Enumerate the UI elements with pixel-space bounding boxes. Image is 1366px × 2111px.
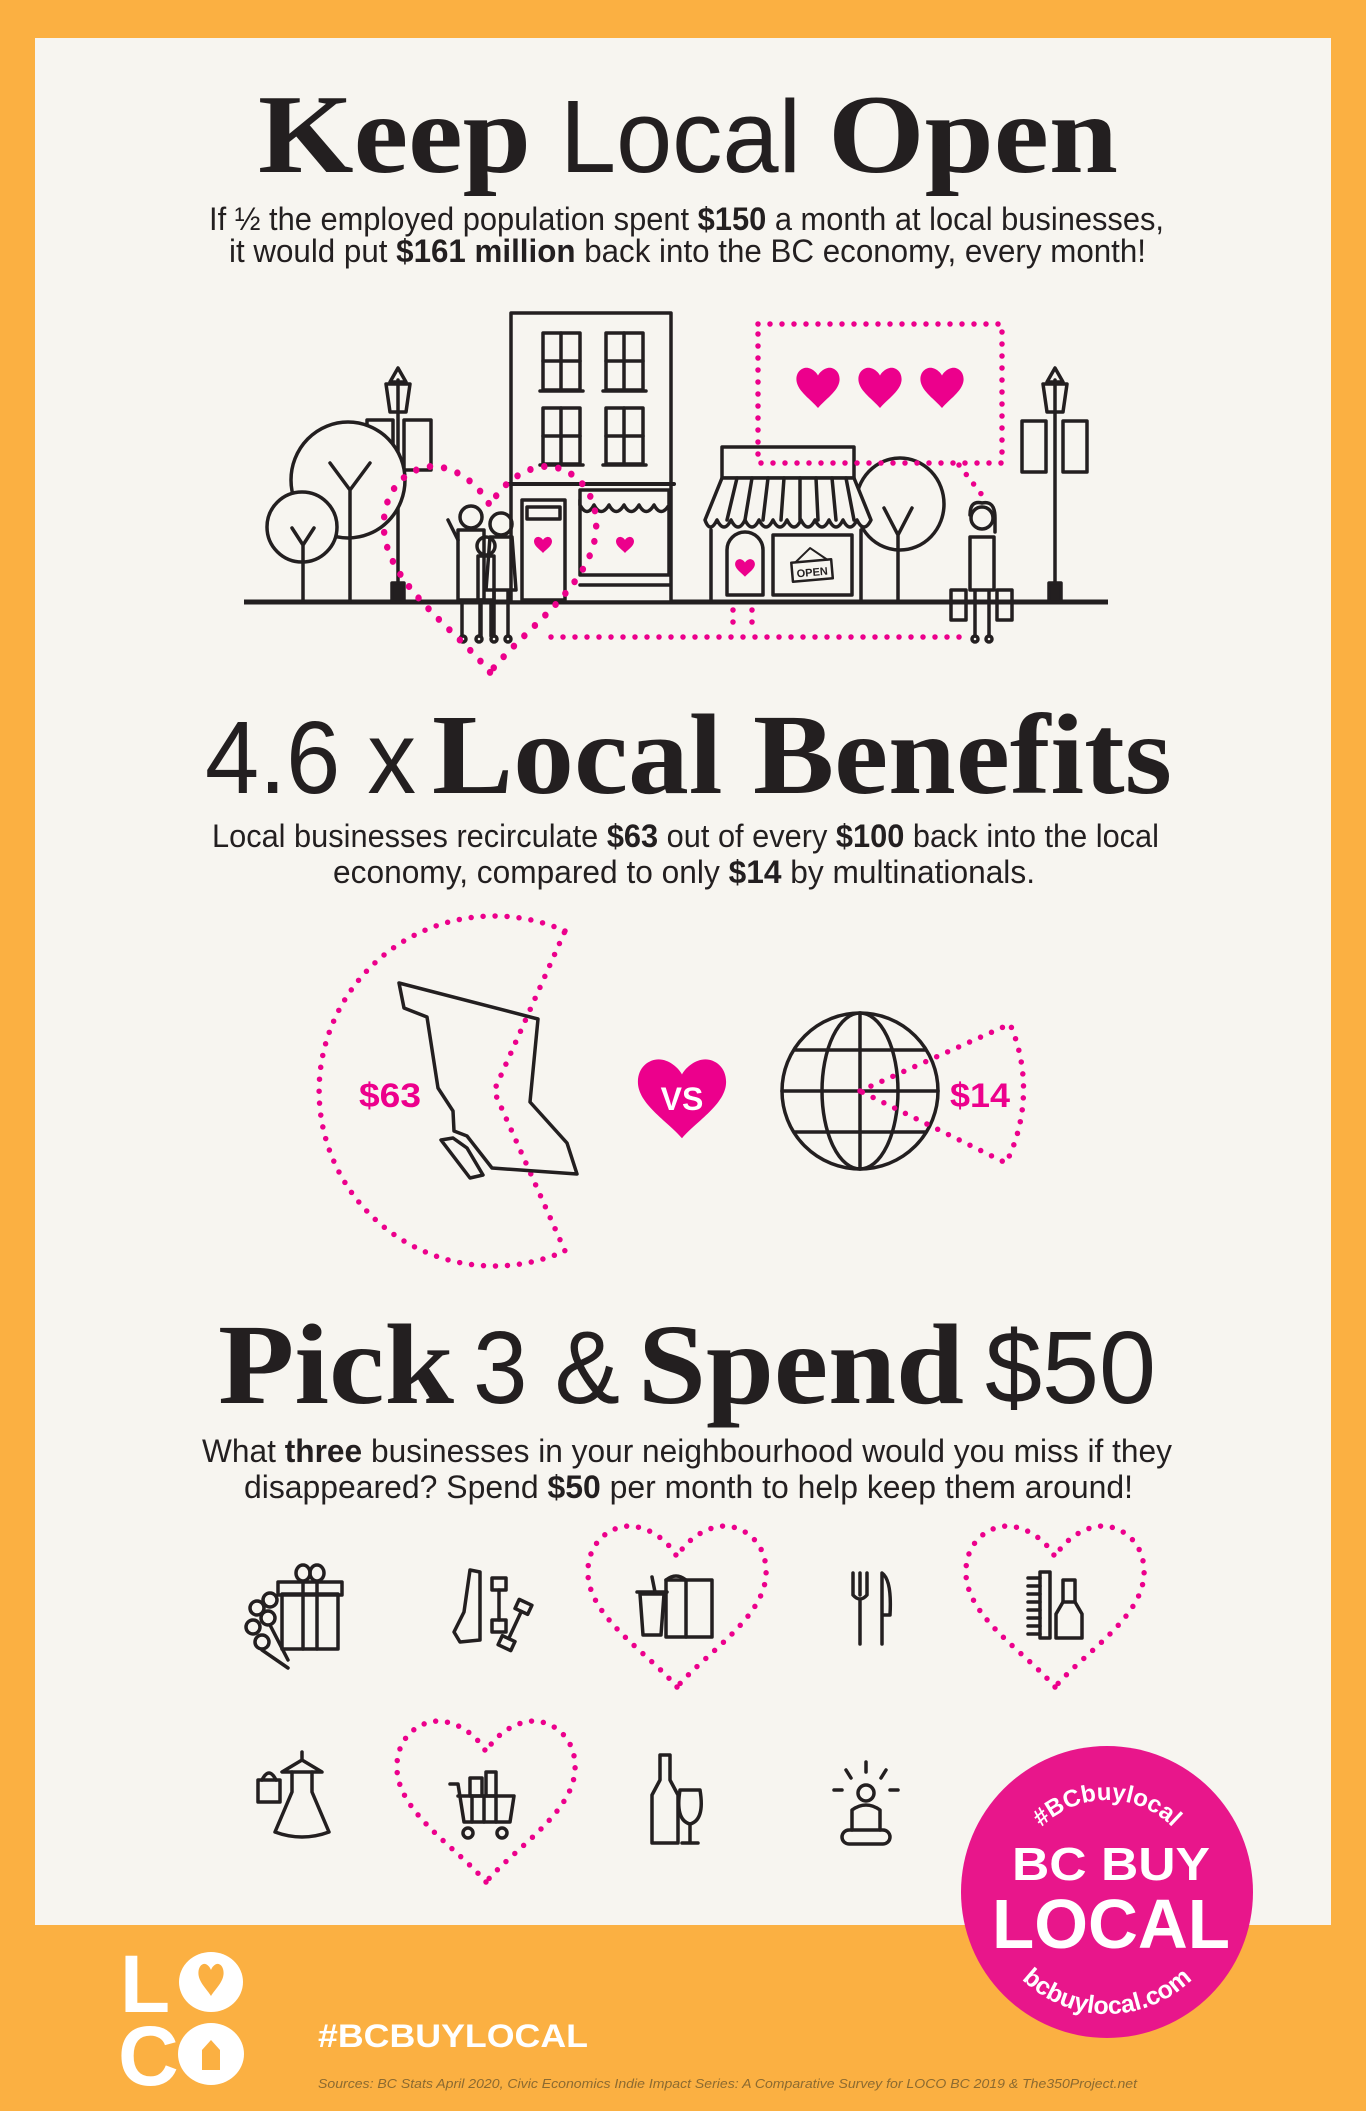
badge: BC Buy Local circle: BC BUY	[1012, 1838, 1210, 1890]
icon grid: businesses	[246, 1526, 1144, 1882]
icon: comb and nail polish	[1028, 1572, 1082, 1638]
title: Keep Local Open: Open	[828, 73, 1118, 197]
text block: recirculation: Local businesses recirculate $63 out of every $100 back into the local	[212, 818, 1159, 854]
sources footnote: Sources: BC Stats April 2020, Civic Economics Indie Impact Series: A Comparative Survey for LOCO BC 2019 & The350Project.net	[318, 2076, 1139, 2091]
title: Keep Local Open: Keep	[258, 73, 531, 197]
icon: right lamp post	[1022, 368, 1087, 602]
heading: Pick 3 & Spend $50: Pick	[218, 1301, 455, 1428]
logo: LOCO: C	[118, 2009, 179, 2103]
dotted heart around family	[384, 466, 596, 672]
icon: BC map	[399, 983, 577, 1178]
text block: intro subtitle: If ½ the employed population spent $150 a month at local businesses,	[209, 201, 1164, 237]
illustration: street scene	[244, 313, 1108, 672]
icon: dress and handbag	[258, 1752, 329, 1837]
label: $63: $63	[359, 1077, 421, 1115]
icon: wine bottle and glass	[652, 1755, 701, 1843]
text block: recirculation	[212, 818, 1159, 890]
badge: BC Buy Local circle: bcbuylocal.com	[1022, 1966, 1192, 2016]
icon: family	[448, 506, 516, 642]
icon: gift and flowers	[246, 1565, 342, 1668]
heading: 4.6 x Local Benefits: 4.6 x	[205, 700, 416, 815]
heading: Pick 3 & Spend $50	[218, 1301, 1156, 1428]
dotted speech box with hearts	[758, 324, 1002, 495]
badge: BC Buy Local circle: LOCAL	[992, 1885, 1230, 1963]
heading: Pick 3 & Spend $50: Spend	[638, 1301, 964, 1428]
icon: shoe and dumbbells	[454, 1570, 532, 1651]
dotted heart 3	[397, 1721, 575, 1882]
text block: intro subtitle	[209, 201, 1164, 269]
icon: fork and knife	[853, 1573, 890, 1644]
street line	[244, 600, 1108, 604]
title: Keep Local Open	[258, 73, 1118, 197]
icon: meditation	[834, 1762, 898, 1844]
icon: coffee cup and bag	[637, 1576, 712, 1637]
icon: small hearts in building	[534, 537, 634, 553]
logo: LOCO: L	[120, 1939, 170, 2030]
hashtag: #BCBUYLOCAL: #BCBUYLOCAL	[318, 2018, 588, 2054]
heading: 4.6 x Local Benefits: Local Benefits	[432, 691, 1172, 818]
heading: Pick 3 & Spend $50: $50	[985, 1310, 1156, 1425]
dotted heart 2	[966, 1526, 1144, 1687]
icon: tall building	[509, 313, 674, 602]
icon: tree right	[856, 458, 944, 602]
label: $14: $14	[950, 1077, 1010, 1115]
text block: pick three: disappeared? Spend $50 per month to help keep them around!	[244, 1469, 1133, 1505]
badge: BC Buy Local circle	[961, 1746, 1253, 2038]
text block: pick three: What three businesses in your neighbourhood would you miss if they	[202, 1433, 1172, 1469]
icon: open shop	[705, 447, 871, 602]
text block: pick three	[202, 1433, 1172, 1505]
text: OPEN sign: OPEN	[796, 566, 828, 580]
heading: Pick 3 & Spend $50: 3 &	[473, 1310, 620, 1425]
chart: multinational wedge $14	[782, 1013, 1024, 1169]
text block: recirculation: economy, compared to only $14 by multinationals.	[333, 854, 1035, 890]
icon: shopper woman	[951, 502, 1012, 642]
logo: LOCO	[118, 1939, 244, 2103]
icon: left lamp post	[367, 368, 431, 602]
text block: intro subtitle: it would put $161 million back into the BC economy, every month!	[229, 233, 1146, 269]
chart: local pie $63	[319, 916, 577, 1266]
title: Keep Local Open: Local	[560, 79, 801, 194]
icon: VS heart: VS	[661, 1081, 703, 1117]
badge: BC Buy Local circle: #BCbuylocal	[1034, 1785, 1184, 1826]
icon: heart in shop door	[735, 559, 755, 577]
icon: shopping cart	[450, 1772, 514, 1838]
icon: trees left	[267, 422, 405, 602]
dotted heart 1	[588, 1526, 766, 1687]
dotted path connecting shop	[551, 610, 965, 637]
icon: VS heart	[638, 1059, 726, 1138]
